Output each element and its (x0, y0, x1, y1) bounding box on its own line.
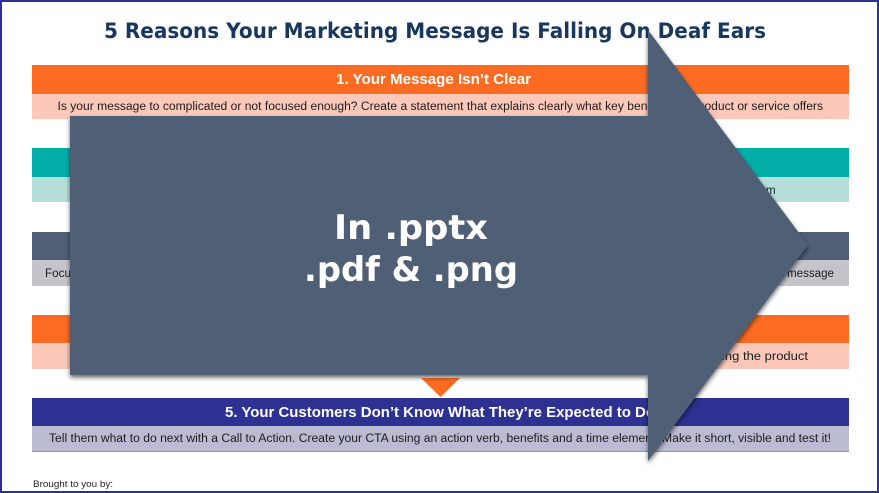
text: reason 3 description end: message (787, 268, 834, 280)
text: credit: Brought to you by: (33, 479, 113, 489)
panel: reason 3 (32, 232, 849, 286)
text: format callout: In .pptx (334, 208, 488, 248)
arrow: format callout (70, 30, 808, 461)
heading: reason 5: 5. Your Customers Don’t Know What They’re Expected to Do (225, 405, 655, 421)
text: reason 3 description start: Focu (45, 268, 71, 280)
text: reason 5 description: Tell them what to do next with a Call to Action. Create your CTA using an action verb, benefits and a time element. Make it short, visible and test it! (49, 433, 831, 445)
title: 5 Reasons Your Marketing Message Is Falling On Deaf Ears (104, 19, 766, 43)
panel: reason 4 (32, 315, 849, 369)
text: reason 1 description: Is your message to complicated or not focused enough? Create a statement that explains clearly what key benefit your product or service offers (58, 101, 823, 113)
arrow: down connector (421, 378, 460, 397)
heading: reason 1: 1. Your Message Isn’t Clear (336, 72, 531, 88)
panel: reason 2 (32, 148, 849, 202)
text: reason 4 description end: ing the product (722, 351, 809, 363)
panel: reason 5 (32, 398, 849, 452)
text: format callout: .pdf & .png (304, 250, 518, 290)
text: reason 2 description fragment: m (766, 185, 776, 197)
panel: reason 1 (32, 65, 849, 119)
